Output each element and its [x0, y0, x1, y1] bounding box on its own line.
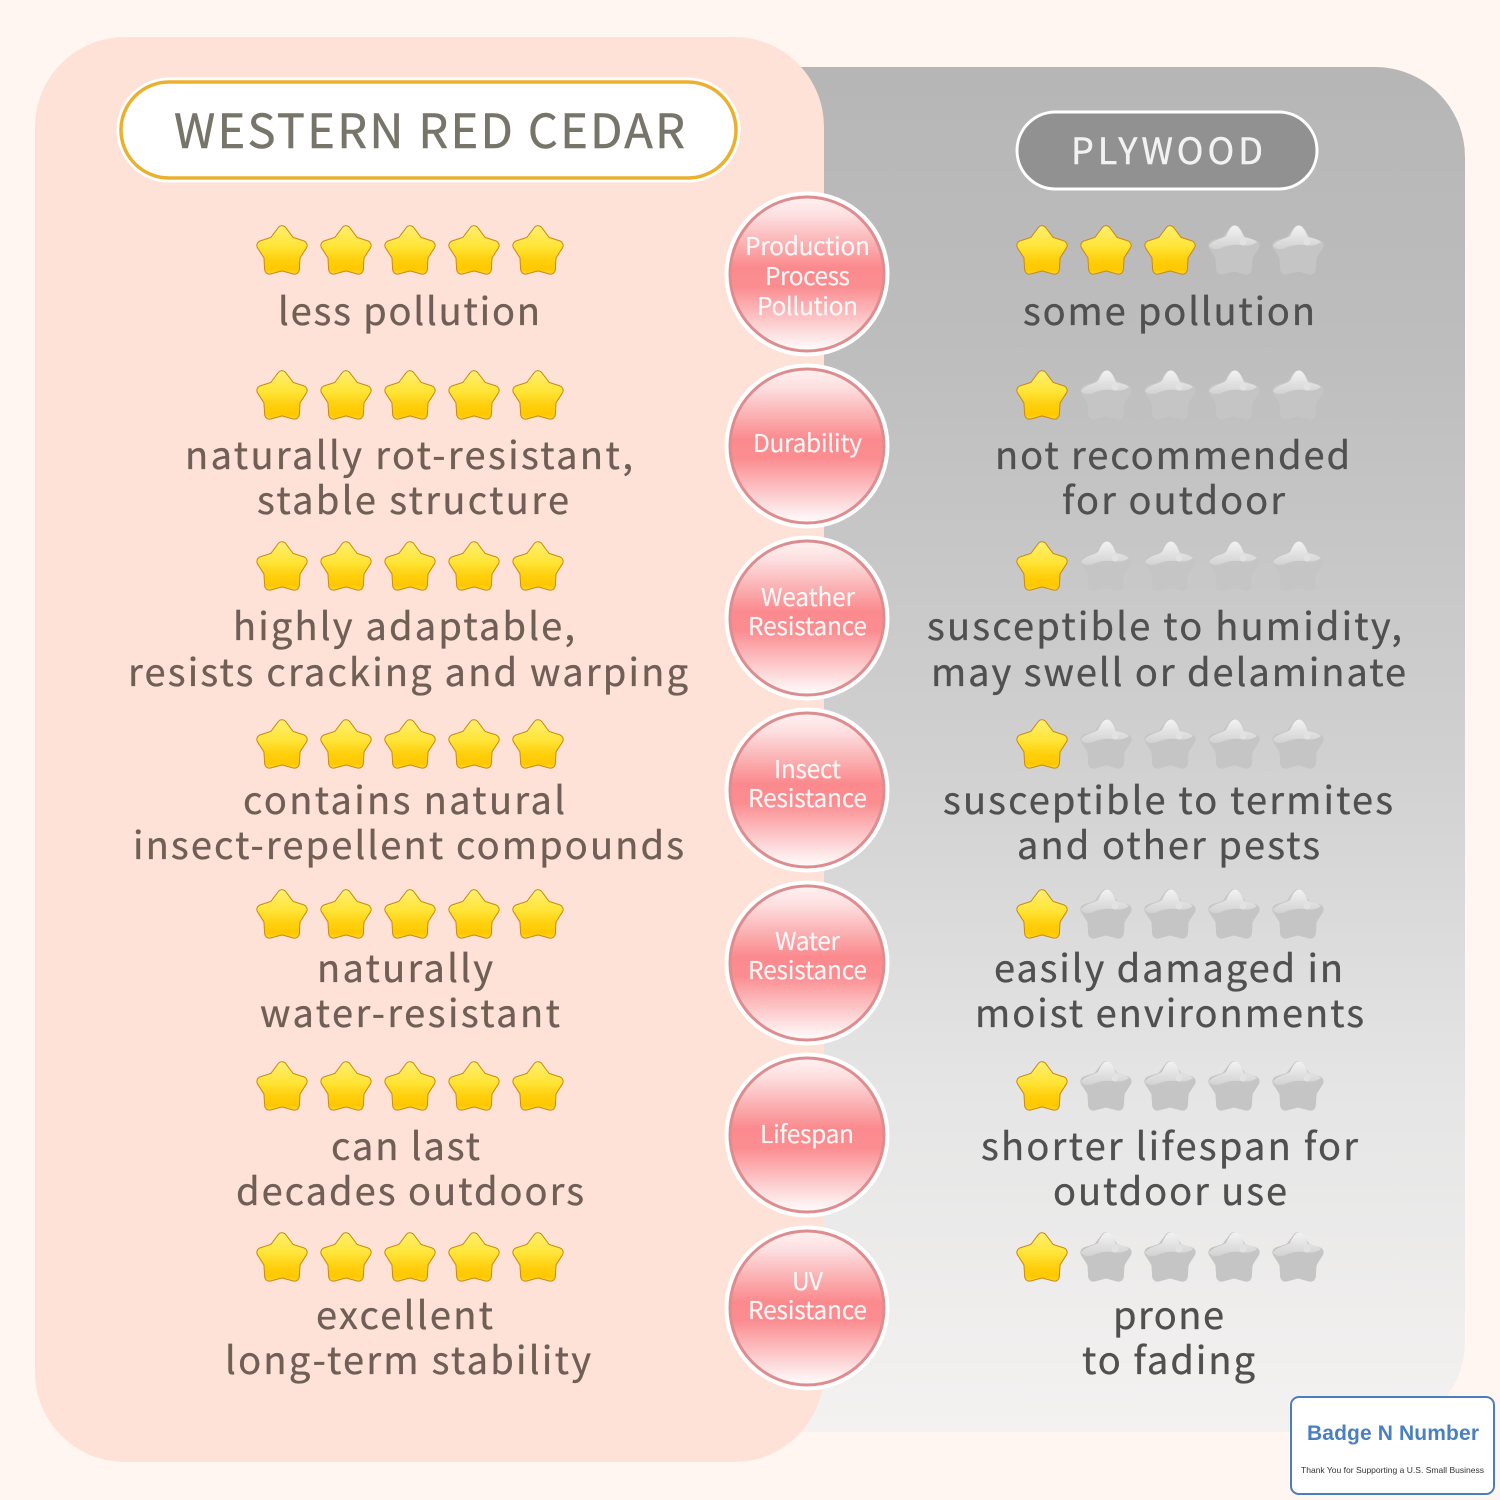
- stars: plywood water: [1022, 890, 1321, 933]
- row: durability: [185, 366, 1350, 526]
- text: plywood insect: [943, 770, 1393, 870]
- seller badge: badge n number: [1291, 1397, 1494, 1494]
- text: plywood water: easily damaged in: [994, 938, 1343, 993]
- badge: production process pollution: Production: [745, 228, 870, 263]
- text: cedar uv: [225, 1285, 591, 1385]
- text: cedar lifespan: decades outdoors: [236, 1161, 584, 1216]
- text: cedar water: water-resistant: [260, 983, 560, 1038]
- text: cedar durability: stable structure: [257, 470, 569, 525]
- badge: weather resistance: Resistance: [748, 608, 867, 643]
- row: uv resistance: [225, 1228, 1321, 1388]
- text: plywood weather: may swell or delaminate: [931, 642, 1406, 697]
- stars: cedar weather: [262, 546, 558, 585]
- stars: plywood insect: [1022, 720, 1321, 763]
- text: cedar water: [260, 938, 560, 1038]
- panel: plywood background: [700, 67, 1465, 1432]
- text: plywood weather: [927, 596, 1406, 697]
- heading: plywood: [1017, 112, 1317, 189]
- badge: durability: [727, 366, 887, 526]
- stars: cedar insect: [262, 724, 558, 763]
- heading: western red cedar: [120, 81, 737, 179]
- stars: plywood uv: [1022, 1232, 1321, 1276]
- text: cedar uv: long-term stability: [225, 1330, 591, 1385]
- row: weather resistance: [128, 538, 1406, 698]
- badge: production process pollution: [727, 194, 887, 354]
- text: cedar pollution: less pollution: [278, 281, 540, 336]
- stars: cedar durability: [262, 376, 558, 414]
- text: plywood durability: not recommended: [995, 425, 1350, 480]
- text: plywood water: [975, 938, 1364, 1038]
- seller badge: badge n number: Badge N Number: [1307, 1422, 1479, 1445]
- badge: insect resistance: Resistance: [748, 780, 867, 815]
- stars: cedar five of five: [262, 230, 558, 269]
- badge: uv resistance: UV: [792, 1263, 824, 1298]
- badge: uv resistance: [727, 1228, 887, 1388]
- row: water resistance: [260, 883, 1364, 1043]
- text: plywood water: moist environments: [975, 983, 1364, 1038]
- text: cedar insect: contains natural: [243, 770, 565, 825]
- stars: cedar uv: [262, 1238, 558, 1276]
- badge: production process pollution: Process: [765, 258, 850, 293]
- badge: uv resistance: Resistance: [748, 1292, 867, 1327]
- text: cedar durability: naturally rot-resistant,: [185, 425, 633, 480]
- badge: lifespan: [727, 1055, 887, 1215]
- text: cedar weather: [128, 596, 688, 697]
- panel: western red cedar background: [35, 37, 824, 1462]
- heading: plywood: PLYWOOD: [1071, 123, 1263, 175]
- badge: lifespan: Lifespan: [760, 1116, 854, 1151]
- text: plywood durability: [995, 425, 1350, 525]
- seller badge: badge n number: Thank You for Supporting a U.S. Small Business: [1301, 1465, 1484, 1475]
- text: plywood uv: prone: [1113, 1285, 1224, 1340]
- text: plywood durability: for outdoor: [1062, 470, 1285, 525]
- text: plywood lifespan: shorter lifespan for: [981, 1116, 1358, 1171]
- badge: insect resistance: Insect: [774, 751, 841, 786]
- text: plywood uv: [1082, 1285, 1255, 1385]
- text: cedar weather: highly adaptable,: [233, 596, 575, 651]
- badge: durability: Durability: [753, 425, 862, 460]
- stars: cedar lifespan: [262, 1066, 558, 1105]
- text: cedar lifespan: can last: [331, 1116, 480, 1171]
- badge: water resistance: Water: [775, 923, 840, 958]
- stars: plywood durability: [1022, 370, 1321, 414]
- text: plywood pollution: some pollution: [1023, 281, 1315, 336]
- row: production process pollution: [262, 194, 1321, 354]
- stars: cedar water: [262, 894, 558, 933]
- text: plywood lifespan: [981, 1116, 1358, 1216]
- badge: weather resistance: Weather: [761, 579, 855, 614]
- text: cedar uv: excellent: [316, 1285, 493, 1340]
- badge: water resistance: Resistance: [748, 952, 867, 987]
- text: cedar insect: [133, 770, 684, 870]
- text: cedar insect: insect-repellent compounds: [133, 815, 684, 870]
- text: plywood insect: susceptible to termites: [943, 770, 1393, 825]
- text: cedar weather: resists cracking and warping: [128, 642, 688, 697]
- text: plywood insect: and other pests: [1017, 815, 1320, 870]
- stars: plywood weather: [1022, 542, 1321, 585]
- heading: western red cedar: WESTERN RED CEDAR: [174, 93, 685, 162]
- text: plywood weather: susceptible to humidity,: [927, 596, 1402, 651]
- badge: water resistance: [727, 883, 887, 1043]
- badge: weather resistance: [727, 538, 887, 698]
- stars: plywood three of five: [1022, 226, 1321, 269]
- text: plywood uv: to fading: [1082, 1330, 1255, 1385]
- row: insect resistance: [133, 710, 1393, 870]
- row: lifespan: [236, 1055, 1358, 1216]
- text: cedar durability: [185, 425, 633, 525]
- badge: production process pollution: Pollution: [757, 288, 858, 323]
- text: cedar water: naturally: [317, 938, 493, 993]
- badge: insect resistance: [727, 710, 887, 870]
- text: plywood lifespan: outdoor use: [1053, 1161, 1287, 1216]
- text: cedar lifespan: [236, 1116, 584, 1216]
- stars: plywood lifespan: [1022, 1062, 1321, 1105]
